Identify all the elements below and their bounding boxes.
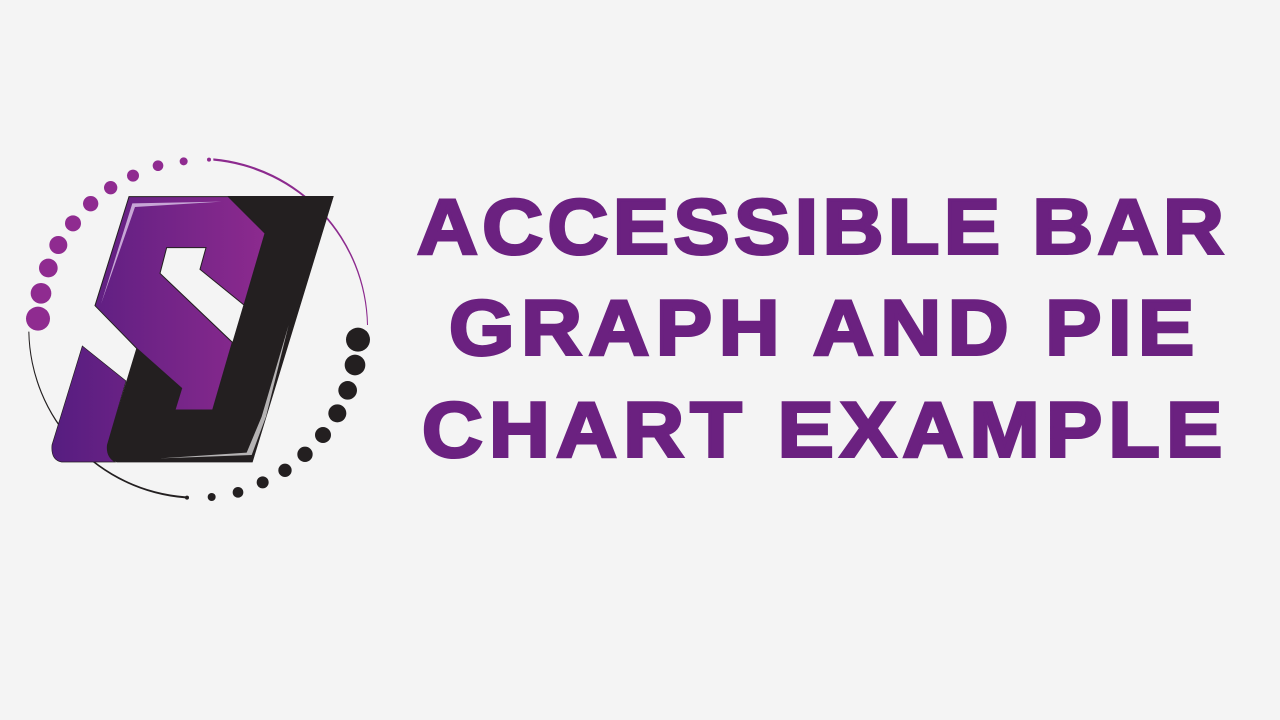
title line 3: CHART EXAMPLE <box>422 387 1222 474</box>
black dots <box>185 328 370 501</box>
top-left highlight <box>101 202 222 304</box>
black arc <box>28 332 186 498</box>
purple dots <box>26 157 211 331</box>
title <box>417 184 1224 474</box>
title line 2: GRAPH AND PIE <box>449 285 1194 372</box>
letter J, black <box>107 196 333 462</box>
purple arc <box>213 158 368 325</box>
letter S, lower purple <box>52 346 126 462</box>
title line 1: ACCESSIBLE BAR <box>417 184 1224 271</box>
bottom-right highlight <box>160 325 289 458</box>
letter S, upper purple <box>95 197 265 410</box>
logo <box>26 157 370 501</box>
